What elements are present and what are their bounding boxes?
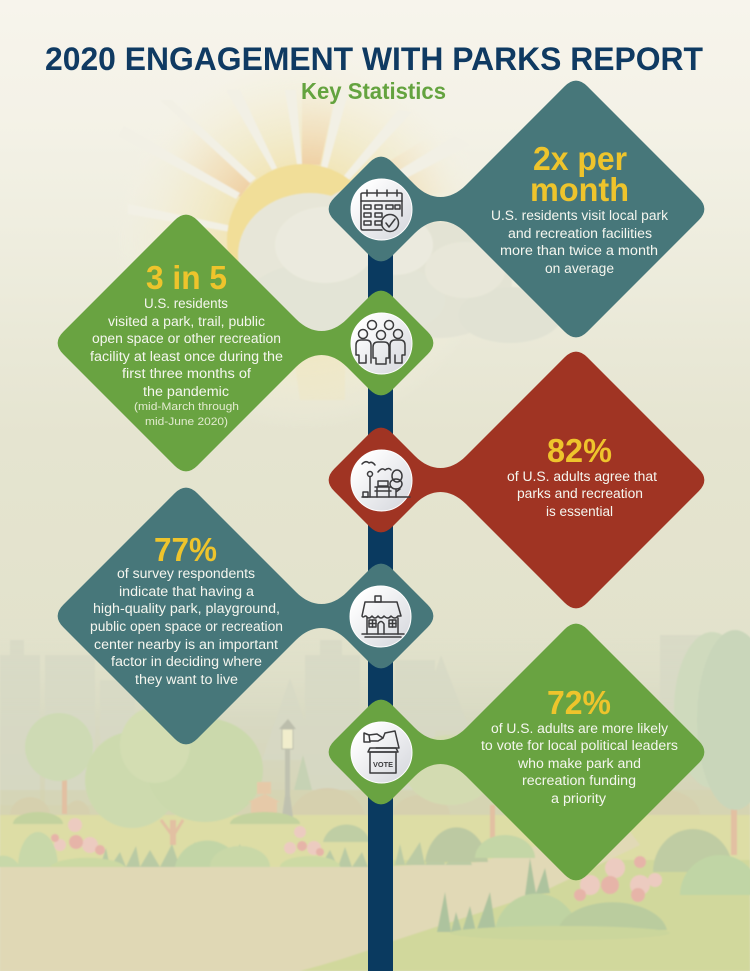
description: is essential bbox=[546, 504, 613, 519]
diamond connector shape bbox=[58, 215, 433, 471]
description: and recreation facilities bbox=[508, 226, 652, 241]
description: to vote for local political leaders bbox=[481, 738, 678, 753]
flowers bbox=[51, 818, 324, 856]
description: who make park and bbox=[517, 756, 641, 771]
description: high-quality park, playground, bbox=[93, 601, 280, 616]
stat: 77%: 77% bbox=[154, 531, 217, 568]
panel: 72% bbox=[329, 624, 704, 880]
timeline spine bbox=[368, 205, 393, 971]
diamond connector shape bbox=[329, 624, 704, 880]
panel: 2x per month bbox=[329, 81, 704, 337]
background: sun and rays bbox=[113, 50, 493, 430]
description bbox=[507, 469, 657, 519]
description bbox=[481, 721, 678, 806]
icon: group of people bbox=[351, 313, 412, 374]
background: cloud bbox=[238, 185, 562, 343]
background: park scene bbox=[0, 620, 750, 971]
icon: park bench, lamp and tree bbox=[351, 450, 412, 511]
description: the pandemic bbox=[143, 384, 229, 399]
foreground bushes, right bbox=[450, 894, 670, 940]
description: visited a park, trail, public bbox=[108, 314, 265, 329]
stat: 3 in 5: 3 in 5 bbox=[146, 259, 227, 296]
description: U.S. residents bbox=[144, 296, 228, 311]
description: factor in deciding where bbox=[111, 654, 262, 669]
icon: calendar bbox=[351, 179, 412, 240]
description bbox=[90, 296, 283, 428]
description: they want to live bbox=[135, 672, 238, 687]
lawn shrubs bbox=[13, 812, 370, 842]
lawn band bbox=[0, 815, 750, 885]
description: on average bbox=[545, 261, 614, 276]
description bbox=[491, 208, 668, 276]
trees bbox=[25, 630, 750, 855]
description: more than twice a month bbox=[500, 243, 658, 258]
description: parks and recreation bbox=[517, 486, 643, 501]
stat: 72%: 72% bbox=[547, 684, 611, 721]
description: facility at least once during the bbox=[90, 349, 283, 364]
right bushes and grass bbox=[395, 827, 750, 932]
description: indicate that having a bbox=[119, 584, 255, 599]
icon: ballot box bbox=[351, 722, 412, 783]
title: 2020 ENGAGEMENT WITH PARKS REPORT bbox=[45, 41, 703, 77]
description: recreation funding bbox=[522, 773, 636, 788]
panel: 77% bbox=[58, 488, 433, 744]
diamond connector shape bbox=[58, 488, 433, 744]
description bbox=[90, 566, 283, 687]
stat line 2: month bbox=[530, 171, 629, 208]
icon: ballot box: VOTE bbox=[373, 760, 393, 769]
ground-line bushes and grass bbox=[0, 832, 368, 867]
description: of U.S. adults are more likely bbox=[491, 721, 668, 736]
diamond connector shape bbox=[329, 352, 704, 608]
stat: 82%: 82% bbox=[547, 432, 612, 469]
icon: house bbox=[350, 586, 411, 647]
description: U.S. residents visit local park bbox=[491, 208, 668, 223]
stat: 2x per month: 2x per bbox=[533, 140, 627, 177]
subtitle: Key Statistics bbox=[301, 78, 446, 104]
description: (mid-March through bbox=[134, 401, 239, 413]
description: center nearby is an important bbox=[94, 637, 278, 652]
description: a priority bbox=[551, 791, 606, 806]
panel: 82% bbox=[329, 352, 704, 608]
ground path, left bbox=[0, 867, 393, 971]
panel: 3 in 5 bbox=[58, 215, 433, 471]
description: of U.S. adults agree that bbox=[507, 469, 657, 484]
ground and lawn, right bbox=[300, 825, 750, 971]
city haze and skyline bbox=[0, 620, 750, 820]
description: open space or other recreation bbox=[92, 331, 281, 346]
description: first three months of bbox=[122, 366, 251, 381]
description: mid-June 2020) bbox=[145, 416, 228, 428]
large flowers, right bbox=[574, 856, 662, 902]
pagoda and lamp post bbox=[248, 719, 296, 817]
diamond connector shape bbox=[329, 81, 704, 337]
description: of survey respondents bbox=[117, 566, 255, 581]
description: public open space or recreation bbox=[90, 619, 283, 634]
